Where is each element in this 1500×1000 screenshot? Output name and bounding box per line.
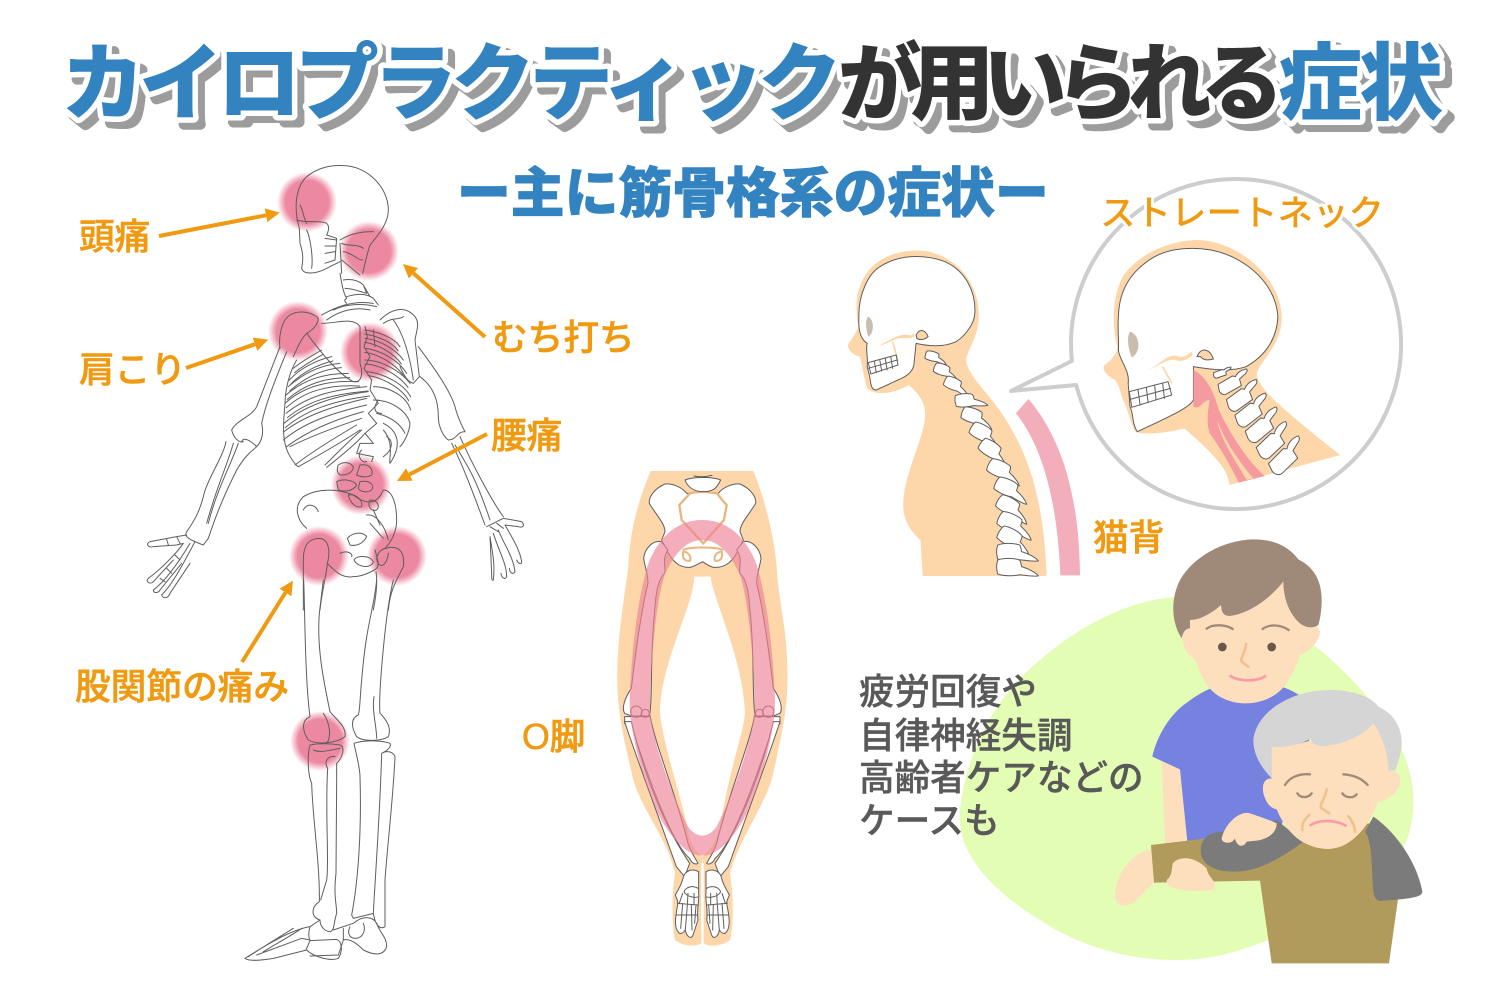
text block: other cases: ケースも xyxy=(859,801,1000,841)
label: 肩こり with arrow: 肩こり xyxy=(79,350,186,390)
skull xyxy=(1118,248,1278,432)
label: 肩こり with arrow xyxy=(79,344,255,390)
pain spot: neck xyxy=(339,221,399,281)
skeleton legs and feet xyxy=(245,580,395,960)
flesh silhouette xyxy=(617,471,787,946)
label: 猫背: 猫背 xyxy=(1093,518,1164,558)
right leg bones xyxy=(706,541,781,937)
pain spot: shoulder xyxy=(268,301,328,361)
label: 股関節の痛み with arrow xyxy=(75,592,289,707)
label: 頭痛 with arrow: 頭痛 xyxy=(79,217,150,257)
text block: other cases: 高齢者ケアなどの xyxy=(859,758,1144,798)
speech bubble circle xyxy=(1011,179,1401,509)
gap between feet xyxy=(701,855,704,947)
label: O脚: O脚 xyxy=(522,717,585,757)
pelvis xyxy=(649,475,756,567)
rounded back illustration xyxy=(848,251,1080,576)
green background blob xyxy=(960,596,1414,960)
straight cervical vertebrae xyxy=(1213,367,1312,477)
neck muscle xyxy=(1193,370,1265,483)
left leg bones (mirror) xyxy=(623,541,699,937)
text block: other cases xyxy=(859,672,1144,841)
label: 腰痛 with arrow: 腰痛 xyxy=(491,416,562,456)
pain spot: left hip xyxy=(289,526,349,586)
title: カイロプラクティック xyxy=(61,37,836,131)
body silhouette xyxy=(848,251,1047,576)
skeleton upper body lines xyxy=(147,166,523,610)
title: 症状 xyxy=(1278,37,1443,131)
bowed leg highlight band xyxy=(630,520,775,856)
text block: other cases: 自律神経失調 xyxy=(859,716,1072,756)
label: むち打ち with arrow xyxy=(414,273,635,358)
neck silhouette xyxy=(1104,240,1340,485)
title xyxy=(61,37,1443,131)
bow legs illustration xyxy=(617,471,787,947)
label: むち打ち with arrow: むち打ち xyxy=(492,318,635,358)
label: 股関節の痛み with arrow: 股関節の痛み xyxy=(75,667,289,707)
spine xyxy=(924,350,1039,576)
pain spot: knee xyxy=(290,711,350,771)
title: が用いられる xyxy=(838,37,1275,131)
caregiver and elderly person xyxy=(1115,539,1422,963)
elderly person xyxy=(1115,690,1422,963)
subtitle: ー主に筋骨格系の症状ー xyxy=(457,164,1049,224)
skull xyxy=(859,256,975,390)
straight neck illustration xyxy=(1104,240,1340,485)
pain spot: right hip xyxy=(367,526,427,586)
caregiver xyxy=(1152,539,1322,845)
label: ストレートネック: ストレートネック xyxy=(1100,193,1384,233)
text block: other cases: 疲労回復や xyxy=(859,672,1037,712)
pain spot: lower back xyxy=(331,455,391,515)
curved back highlight xyxy=(1016,399,1080,575)
full body skeleton with pain spots xyxy=(147,166,523,960)
label: 腰痛 with arrow xyxy=(409,416,562,474)
pain spot: upper back xyxy=(340,322,400,382)
pain spot: head xyxy=(277,172,337,232)
label: 頭痛 with arrow xyxy=(79,215,266,257)
